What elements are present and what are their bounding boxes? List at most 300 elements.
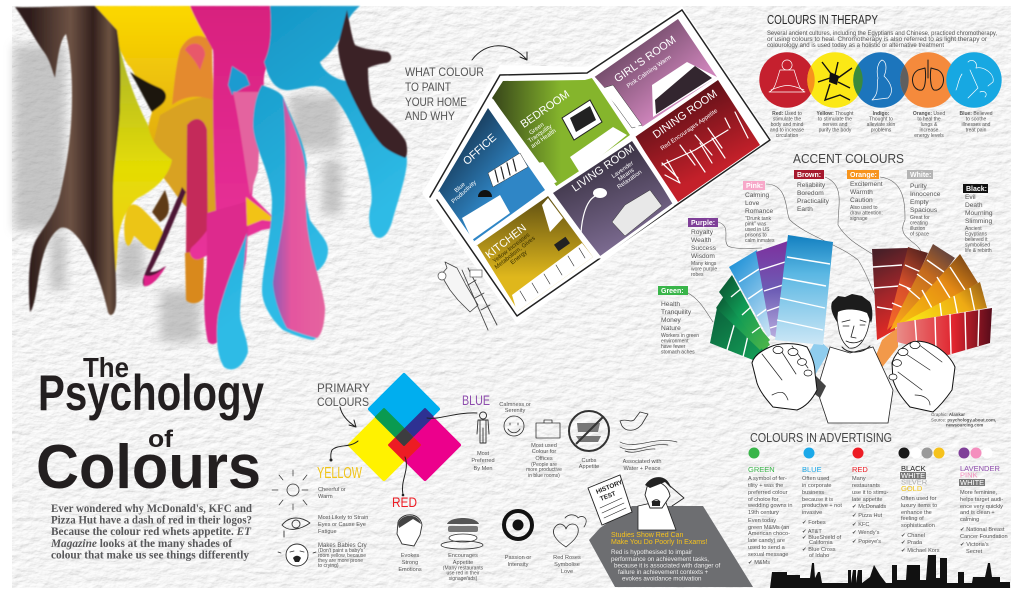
accent label: green: Tranquility [661,309,692,316]
yellow headline: Make You Do Poorly In Exams! [611,539,708,546]
column: red: late appetite [852,497,882,503]
text: water and peace [623,459,661,472]
room: living room [553,141,673,258]
therapy captions: problems [871,128,892,134]
column: blue: ✔ BlueShield of [802,535,842,541]
text: evokes emotions [398,553,422,573]
text: red roses: Symbolise [554,562,580,568]
heading: what colour to paint your home: WHAT COLOUR [405,65,484,79]
text: eye strain: Eyes or Cause Eye [318,522,366,528]
text: calmness: Serenity [505,408,525,414]
text: baby [318,543,367,569]
column: lavender pink white: WHITE [960,478,984,487]
column: black white silver gold: GOLD [901,484,923,493]
text: evokes emotions: Evokes [401,553,419,559]
accent label: brown: Boredom [797,190,824,197]
column: black white silver gold: feeling of [901,516,924,522]
intro text: Magazine looks at the many shades of [50,538,232,550]
heading: COLOURS [317,395,369,409]
accent label: orange: Also used to [850,205,878,211]
column: red: RED [852,465,868,474]
therapy captions: Red: Used to [772,111,802,117]
text: preferred by men: Preferred [471,458,495,464]
accent label: pink: "Drunk tank [745,216,771,222]
accent label: purple [688,218,718,278]
body: because it is associated with danger of [614,562,721,570]
room: girl's room [593,19,717,128]
column: lavender pink white: Cancer Foundation [960,534,1008,540]
icon: man figure [477,412,489,443]
text: curbs appetite: Curbs [582,458,597,464]
column: red: ✔ Pizza Hut [852,513,883,519]
room: dining room [635,80,760,202]
column: blue: in corporate [802,483,832,489]
accent label: purple: Royalty [691,229,714,236]
gray box [589,506,753,587]
therapy captions: Blue: Believed [959,111,993,117]
icon: neuron [818,62,852,100]
therapy circles [759,52,1002,108]
intro text: Because the colour red whets appetite. ET [51,526,252,538]
text: water and peace: Associated with [623,459,661,465]
room: girl's room: Pink Calming Warm [626,55,673,90]
CMY diamonds [350,375,459,479]
accent label: purple: Purple: [691,220,715,227]
therapy captions: circulation [776,133,798,139]
column: lavender pink white: helps target audi- [960,497,1003,503]
exam paper [588,475,632,525]
accent label: purple: robes [691,272,704,278]
room: office: Productivity [451,180,478,205]
intro text [50,503,253,562]
callout: blue [427,392,490,418]
intro: Several ancient cultures, including the Egyptians and Chinese, practiced chromotherapy, [767,30,997,37]
accent label: orange: Excitement [850,181,883,188]
accent label: purple: Success [691,245,717,252]
illustration: man holding swatches [752,294,955,423]
column: red: Many [852,476,866,482]
therapy captions: to soothe [966,116,987,122]
text: calmness [499,402,531,414]
exam paper: HISTORY [595,479,624,496]
text: water and peace: Water + Peace [624,466,660,472]
therapy captions: illnesses and [962,122,991,128]
icon: crying baby [278,544,316,566]
column: green: tility + was the [748,483,783,489]
room: living room: Relaxation [617,170,643,191]
therapy captions: nerves and [823,122,848,128]
accent label: green [658,286,699,356]
text: encourages appetite: Appetite [453,560,473,566]
swatch fan: right, reds and yellows [872,244,992,370]
accent label: pink: prisons to [745,232,767,238]
column: lavender pink white: and is clean + [960,510,995,516]
column: green: of choice for [748,497,779,503]
accent label: orange: signage [850,216,868,222]
accent label: green: Workers in green [661,333,699,339]
icon: sun [272,470,308,510]
text: curbs appetite [579,458,599,470]
column: black white silver gold: ✔ Prada [901,540,923,546]
column: blue: ✔ Blue Cross [802,547,836,553]
accent label: white: White: [910,172,931,179]
accent label: purple: Wisdom [691,253,715,260]
column: black white silver gold: ✔ Michael Kors [901,548,940,554]
text: preferred by men: Most [477,451,490,457]
torso [817,347,893,423]
column: black white silver gold: ✔ Chanel [901,533,925,539]
text: offices: more productive [526,467,562,473]
accent label: green: have fewer [661,344,686,350]
room: bedroom: Tranquility [527,124,553,145]
intro text: colour that make us see things differently [51,550,249,562]
credits [931,412,996,428]
accent label: purple: Wealth [691,237,712,244]
column: blue: invasive [802,510,822,516]
accent label: orange: Orange: [850,172,877,179]
therapy captions: Yellow: Thought [817,111,854,117]
accent label: purple: wore purple [691,266,717,272]
text: eye strain: Fatigue [318,529,337,535]
text: encourages appetite: signage/ads) [449,576,478,582]
accent label: green: Green: [661,288,684,295]
body: performance on achievement tasks, [611,556,709,563]
heading: COLOURS IN ADVERTISING [750,430,892,445]
column: black white silver gold: BLACK [901,464,926,473]
callout: red [392,457,417,510]
room: office: Blue [454,181,467,194]
column: lavender pink white: calming [960,517,979,523]
column: black white silver gold [900,464,940,554]
therapy captions: Orange: Used [913,111,945,117]
accent label: white [907,170,941,238]
heading: what colour to paint your home: AND WHY [405,109,455,123]
accent label: purple: Many kings [691,261,717,267]
text: eye strain: Most Likely to Strain [318,515,368,521]
room: bedroom [492,78,630,187]
illustration: dripping paint [14,6,407,369]
therapy captions: to heal the [917,116,941,122]
icon: lungs [912,60,944,90]
accent label: white: Great for [910,215,930,221]
text: encourages appetite: Encourages [448,553,478,559]
accent label: orange: Warmth [850,189,873,196]
accent label: black: Evil [965,194,976,201]
illustration: city skyline [770,555,1010,588]
therapy captions: Thought to [869,116,893,122]
text: passion: Intensity [508,562,529,568]
accent label: black: Slimming [965,218,992,225]
callout: red: RED [392,494,417,510]
column: blue: business [802,490,824,496]
text: encourages appetite: use red in their [446,570,480,576]
section heading: accent colours: ACCENT COLOURS [793,151,904,166]
accent label: white: of space [910,232,929,238]
column: lavender pink white: ✔ Victoria's [960,542,989,548]
room: bedroom: Green [528,122,546,137]
body [611,549,721,582]
heading: what colour to paint your home: TO PAINT [405,80,452,94]
column: green: preferred colour [748,490,788,496]
arrow [340,407,356,427]
column: black white silver gold: WHITE [901,471,925,480]
accent label: pink: used in US [745,227,770,233]
text: offices [526,443,562,479]
column: red: use it to stimu- [852,490,889,496]
callout: yellow [317,441,363,482]
callout: red can make you do poorly in exams [588,475,753,587]
column: red [852,465,889,545]
yellow headline [611,532,708,546]
text: encourages appetite: (Many restaurants [443,566,484,572]
therapy captions: energy levels [914,133,944,139]
column: green: late candy) are [748,538,785,544]
intro: colourology and is used today as a holistic or alternative treatment [767,42,944,49]
accent label: white: Spacious [910,207,938,214]
callout: yellow: YELLOW [317,465,363,482]
title: Colours [36,433,261,502]
column: lavender pink white: ence very quickly [960,504,1003,510]
column: lavender pink white: Secret [966,549,983,555]
text: encourages appetite [443,553,484,582]
wrist band [812,376,826,398]
room: bedroom: and Health [530,128,557,150]
text: baby: to crying) [318,563,339,569]
text: baby: (Don't paint a baby's [318,548,364,554]
accent label: black: life & rebirth [965,248,992,254]
therapy captions: stimulate the [773,116,801,122]
text: passion [505,555,531,568]
therapy captions: body and mind [771,122,804,128]
accent label: green: Health [661,301,680,308]
body: evokes avoidance motivation [622,576,702,582]
accent label: black: Death [965,202,983,209]
text: preferred by men [471,451,495,472]
room: kitchen: KITCHEN [483,222,529,261]
column: blue: California [809,540,834,546]
accent label: brown: Reliability [797,182,826,189]
accent label: green: stomach aches [661,350,695,356]
credits: newsourcing.com [946,422,983,428]
heading [317,381,370,409]
accent label: green: Nature [661,325,681,332]
intro text: Pizza Hut have a dash of red in their logos? [51,514,252,526]
accent label: white: illusion [910,226,926,232]
icon: smiley [504,416,524,436]
column: blue: Often used [802,476,829,482]
text: calmness: Calmness or [499,402,531,408]
therapy captions: to stimulate the [818,116,852,122]
body: Red is hypothesised to impair [611,549,692,556]
column: green [747,465,792,566]
icon: seated woman [872,60,891,100]
column: green: GREEN [748,465,775,474]
column: green: green M&Ms (an [748,525,789,531]
text: curbs appetite: Appetite [579,464,599,470]
column: blue: BLUE [802,465,822,474]
room: girl's room: GIRL'S ROOM [612,34,678,85]
column: green: sexual message [748,552,788,558]
column: lavender pink white [959,464,1008,555]
icon: meditating figure [769,60,805,92]
text: preferred by men: By Men [474,466,492,472]
section: primary colours [272,375,677,582]
swatch fan: left, greens and blues [710,235,833,375]
accent label: black: believed it [965,237,988,243]
room: bedroom: BEDROOM [519,88,572,131]
column: blue [802,465,842,559]
icon: eye [282,518,310,537]
column: lavender pink white: More feminine, [960,490,997,496]
curve connectors from tags to swatches [688,177,922,330]
column: black white silver gold: sophistication [901,523,935,529]
column: red: restaurants [852,483,880,489]
yellow headline: Studies Show Red Can [611,532,683,539]
text: baby: Makes Babies Cry [318,543,367,549]
column: green: ✔ M&Ms [748,560,770,566]
text: red roses [553,555,581,575]
column: blue: productive + not [802,503,842,509]
text: offices: Most used [531,443,557,449]
accent label: brown [794,170,830,213]
hand left [752,344,817,410]
heading: what colour to paint your home: YOUR HOME [405,95,467,109]
accent label: brown: Brown: [797,172,821,179]
icon: dove and waves [620,412,677,452]
text: baby: room yellow, because [318,553,366,559]
credits: Source: psychology.about.com, [931,418,996,422]
column: blue: of Idaho [809,553,829,559]
accent label: black [963,184,993,254]
title: The [83,352,129,383]
column: blue: ✔ Forbes [802,520,826,526]
accent label: green: environment [661,338,689,344]
accent label: pink [743,181,775,244]
room: office: OFFICE [461,132,499,168]
accent label: pink: Love [745,200,760,207]
therapy captions [770,111,993,139]
room: kitchen: Yellow Increases [492,232,531,265]
icon: target [504,511,532,539]
column: red: ✔ KFC [852,522,869,528]
therapy captions: alleviate skin [867,122,896,128]
accent label: black: symbolised [965,242,990,248]
accent label: pink: calm inmates [745,238,775,244]
accent label: white: Empty [910,199,929,206]
title: of [148,426,174,453]
intro text: Ever wondered why McDonald's, KFC and [51,503,253,515]
accent label: brown: Practicality [797,198,830,205]
accent label: orange: draw attention: [850,210,883,216]
text: cheerful: Cheerful or [318,487,346,493]
accent label: pink: Pink: [746,183,763,190]
heading: PRIMARY [317,381,370,395]
icon: burger [441,518,483,549]
intro: or using colours to heal. Chromotherapy is also referred to as light therapy or [767,36,987,43]
column: green: A symbol of fer- [748,476,787,482]
heading: COLOURS IN THERAPY [767,12,878,27]
column: lavender pink white: ✔ National Breast [960,527,1005,533]
accent label: pink: Romance [745,208,774,215]
column: green: 19th century [748,510,779,516]
column: lavender pink white: PINK [960,470,978,480]
column: green: used to send a [748,545,786,551]
therapy captions: Indigo: [873,111,890,117]
accent label: pink: Calming [745,192,770,199]
callout: blue: BLUE [462,392,490,408]
house cross-section [422,6,772,324]
text: red roses: Love [561,569,573,575]
accent label: orange: Caution [850,197,873,204]
accent label: black: Mourning [965,210,993,217]
text: offices: Offices [535,456,553,462]
column: green: American choco- [748,531,790,537]
column: black white silver gold: SILVER [901,478,928,486]
body: failure in achievement contexts + [618,569,709,576]
therapy captions: purify the body [819,128,852,134]
accent label: white: Innocence [910,191,941,198]
column: red: ✔ McDonalds [852,504,886,510]
text: offices: Colour for [532,449,556,455]
accent label: orange [847,170,883,222]
room: living room: Lavender [611,161,635,180]
icon: angry man's head [397,515,422,546]
icon: no-food sign [569,411,609,451]
accent label: white: Purity [910,183,928,190]
column: green: wedding gowns in [747,503,792,509]
room: dining room: DINING ROOM [651,88,720,141]
accent label: black: Black: [966,186,987,193]
column: red: ✔ Wendy's [852,530,880,536]
heading: what colour to paint your home [405,65,484,123]
text: passion: Passion or [505,555,531,561]
column: black white silver gold: enhance the [901,510,932,516]
column: lavender pink white: LAVENDER [960,464,1000,473]
icon: hearts [553,515,586,547]
exam paper: TEST [599,490,617,503]
accent label: brown: Earth [797,206,813,213]
worried student [638,477,684,530]
text: eye strain [318,515,368,535]
column: red: ✔ Popeye's [852,539,881,545]
text: red roses: Red Roses [553,555,581,561]
section: colours in advertising [747,430,1008,566]
icon: briefcase [536,420,560,438]
icon: back figure [956,60,993,98]
text: offices: (People are [531,462,557,468]
accent label: black: Ancient [965,226,982,232]
therapy captions: and to increase [770,128,804,134]
column: black white silver gold: Often used for [901,496,937,502]
hand right [892,341,955,412]
accent label: white: creating [910,220,928,226]
room: dining room: Red Encourages Appetite [660,108,720,152]
text: cheerful: Warm [318,494,333,500]
title: Psychology [38,365,264,421]
column: blue: because it is [802,497,833,503]
column: black white silver gold: luxury items to [901,503,937,509]
credits: Graphic: Alankar [931,412,965,417]
text: evokes emotions: Emotions [398,567,422,573]
arrow: to house [472,46,527,60]
text: cheerful [318,487,346,500]
text: offices: in blue rooms) [528,473,560,479]
section: colours in therapy [759,12,1002,139]
therapy captions: lungs & [921,122,938,128]
room: office [438,108,545,242]
room: living room: Means [617,168,636,183]
therapy captions: increase [920,128,939,134]
